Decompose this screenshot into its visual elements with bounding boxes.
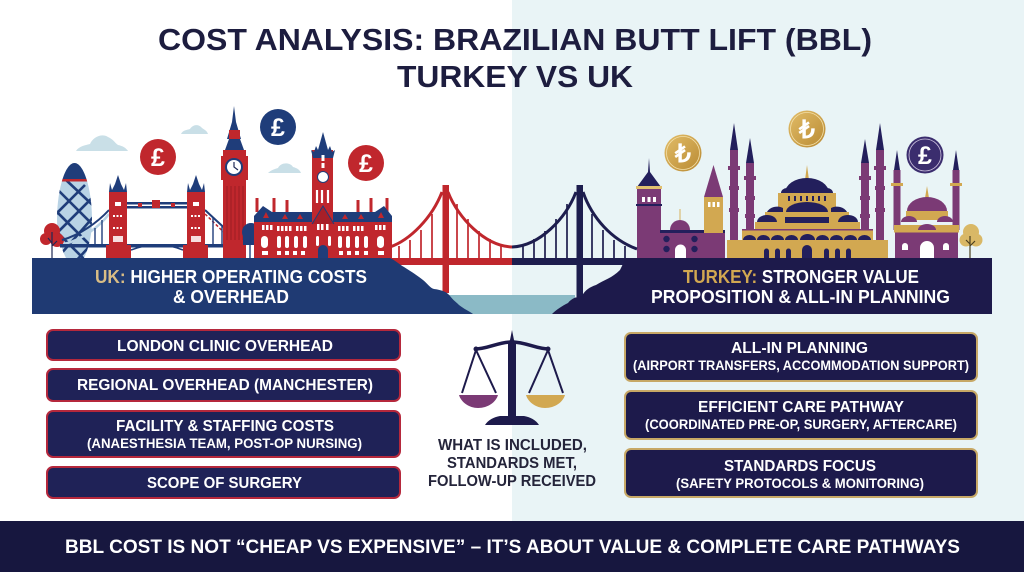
card: facility and staffing costs: FACILITY & STAFFING COSTS xyxy=(116,418,334,435)
illustration: Turkey skyline xyxy=(636,123,982,258)
minarets xyxy=(728,123,962,240)
water under bridge xyxy=(445,295,575,314)
gold tree xyxy=(960,224,982,258)
text block: what matters xyxy=(428,437,596,490)
icon: coins Turkey: ₺ xyxy=(674,140,691,168)
card: all-in planning: (AIRPORT TRANSFERS, ACCOMMODATION SUPPORT) xyxy=(633,358,969,373)
footer banner: BBL COST IS NOT “CHEAP VS EXPENSIVE” – IT’S ABOUT VALUE & COMPLETE CARE PATHWAYS xyxy=(65,536,960,558)
illustration: suspension bridge xyxy=(390,185,637,297)
card: all-in planning xyxy=(625,333,977,381)
card: standards focus: (SAFETY PROTOCOLS & MONITORING) xyxy=(676,476,924,491)
galata tower and building xyxy=(636,158,725,258)
bridge tower right xyxy=(183,175,208,258)
panel: UK cost factors xyxy=(47,330,400,498)
red tree xyxy=(40,223,64,258)
card: London clinic overhead xyxy=(47,330,400,360)
icon: pound coins UK xyxy=(140,109,384,181)
tower bridge xyxy=(60,175,242,258)
text block: what matters: FOLLOW-UP RECEIVED xyxy=(428,473,596,490)
icon: coins Turkey xyxy=(664,110,944,174)
bridge tower left xyxy=(106,175,131,258)
card: efficient care pathway xyxy=(625,391,977,439)
panel: UK banner xyxy=(32,258,473,314)
card: regional overhead: REGIONAL OVERHEAD (MANCHESTER) xyxy=(77,377,373,394)
title: TURKEY VS UK xyxy=(397,60,633,94)
icon: balance scale xyxy=(459,330,565,425)
icon: pound coins UK: £ xyxy=(359,150,373,178)
red half xyxy=(390,185,512,293)
small mosque xyxy=(894,186,959,258)
gherkin tower xyxy=(57,163,92,258)
card: efficient care pathway: EFFICIENT CARE PATHWAY xyxy=(698,399,904,416)
navy tree xyxy=(242,223,260,258)
blue mosque xyxy=(727,165,888,258)
icon: coins Turkey: £ xyxy=(918,142,932,170)
card: efficient care pathway: (COORDINATED PRE-OP, SURGERY, AFTERCARE) xyxy=(645,417,957,432)
icon: pound coins UK: £ xyxy=(151,144,165,172)
panel: UK banner: & OVERHEAD xyxy=(173,287,289,307)
panel: Turkey banner xyxy=(552,258,992,314)
card: facility and staffing costs: (ANAESTHESIA TEAM, POST-OP NURSING) xyxy=(87,436,362,451)
icon: coins Turkey: ₺ xyxy=(798,116,815,144)
manchester town hall xyxy=(254,132,392,258)
card: facility and staffing costs xyxy=(47,411,400,457)
big ben xyxy=(221,106,248,258)
panel: UK banner: UK: HIGHER OPERATING COSTS xyxy=(95,267,367,287)
card: all-in planning: ALL-IN PLANNING xyxy=(731,340,868,357)
text block: what matters: WHAT IS INCLUDED, xyxy=(438,437,587,454)
illustration: clouds xyxy=(76,125,301,173)
navy half xyxy=(512,185,637,297)
illustration: UK skyline xyxy=(40,106,392,265)
card: scope of surgery: SCOPE OF SURGERY xyxy=(147,475,302,492)
panel: Turkey banner: PROPOSITION & ALL-IN PLANNING xyxy=(651,287,950,307)
text block: what matters: STANDARDS MET, xyxy=(447,455,577,472)
footer banner xyxy=(0,521,1024,572)
icon: pound coins UK: £ xyxy=(271,114,285,142)
title xyxy=(158,23,872,94)
card: London clinic overhead: LONDON CLINIC OVERHEAD xyxy=(117,338,333,355)
card: regional overhead xyxy=(47,369,400,401)
panel: Turkey banner: TURKEY: STRONGER VALUE xyxy=(683,267,919,287)
title: COST ANALYSIS: BRAZILIAN BUTT LIFT (BBL) xyxy=(158,23,872,57)
card: standards focus xyxy=(625,449,977,497)
panel: Turkey value factors xyxy=(625,333,977,497)
card: standards focus: STANDARDS FOCUS xyxy=(724,458,876,475)
card: scope of surgery xyxy=(47,467,400,498)
